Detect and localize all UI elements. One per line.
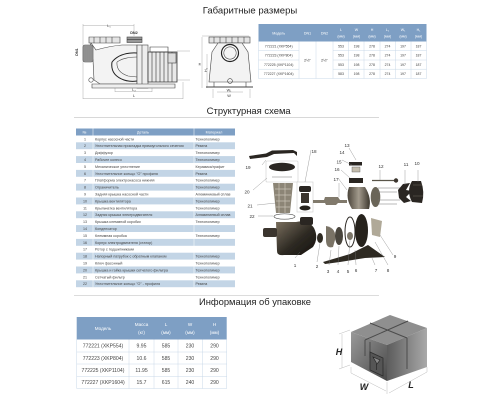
packaging table rows: 585: [162, 368, 170, 374]
pump body: [89, 43, 137, 84]
part: o-ring 22: [274, 214, 295, 219]
dimension table rows: 187: [416, 72, 421, 76]
part: pump body 1: [276, 221, 316, 255]
packaging table rows: 772227 (XKP1604): [81, 380, 125, 386]
icon: package box: [336, 315, 427, 394]
table: dimensions: DN2: [321, 32, 328, 36]
box top: [351, 315, 427, 345]
labels: side view dimensions: DN2: [130, 31, 138, 35]
dimension table rows: 772221 (XKP554): [265, 44, 293, 48]
packaging table rows: 585: [162, 356, 170, 362]
part number labels: [244, 143, 420, 274]
parts table names: Ротор с подшипниками: [95, 248, 134, 252]
label L: L: [408, 380, 414, 390]
parts table numbers: 6: [84, 172, 86, 176]
parts table names: Уплотнительная прокладка прямоугольного сечения: [95, 144, 184, 148]
parts table numbers: [83, 137, 87, 286]
parts table materials: Алюминиевый сплав: [196, 213, 230, 217]
packaging table rows: 10.6: [137, 356, 147, 362]
dimension table rows: 2½": [321, 58, 329, 62]
labels: side view dimensions: [75, 24, 138, 98]
parts table materials: Технополимер: [196, 255, 220, 259]
dimension table rows: 197: [400, 44, 406, 48]
table: dimensions: (мм): [399, 34, 407, 38]
labels: front view dimensions: H: [198, 62, 202, 65]
parts table materials: Технополимер: [196, 137, 220, 141]
parts table numbers: 14: [83, 227, 87, 231]
parts table materials: Технополимер: [196, 275, 220, 279]
parts table names: Конденсатор: [95, 227, 117, 231]
table: dimensions: L₁: [386, 28, 390, 32]
part: rotor 17: [313, 197, 347, 205]
table: packaging: H: [213, 322, 216, 327]
heading: dimensions: Габаритные размеры: [203, 6, 297, 16]
table: dimensions: (мм): [337, 34, 345, 38]
table: dimensions: H: [371, 28, 374, 32]
parts table numbers: 13: [83, 220, 87, 224]
parts table materials: Технополимер: [196, 262, 220, 266]
drawing: pump side view: [83, 24, 190, 99]
leader lines: [253, 148, 418, 265]
labels: front view dimensions: H₁: [204, 67, 208, 72]
part number labels: 20: [244, 190, 250, 194]
part: outlet 18: [297, 182, 313, 212]
parts table materials: Технополимер: [196, 220, 220, 224]
parts table numbers: 11: [83, 206, 87, 210]
dimension table header: [258, 24, 426, 42]
dimension table rows: 274: [385, 44, 390, 48]
part number labels: 2: [316, 264, 319, 269]
part number labels: 12: [378, 164, 384, 169]
dimension table rows: 278: [369, 72, 375, 76]
dimension table rows: 278: [369, 54, 375, 58]
parts table materials: Резина: [196, 282, 207, 286]
dimension table rows: 553: [338, 63, 344, 67]
parts table names: Ограничитель: [95, 186, 119, 190]
part number labels: 10: [414, 161, 420, 166]
parts table materials: Технополимер: [196, 186, 220, 190]
box right face: [387, 328, 427, 381]
part: o-ring 6: [345, 217, 355, 247]
parts table header: [76, 128, 235, 136]
part number labels: 16: [334, 167, 340, 172]
part number labels: 4: [337, 269, 340, 274]
table: dimensions: (мм): [415, 34, 422, 38]
part: impeller 4: [335, 227, 343, 245]
table: packaging: (мм): [210, 330, 220, 335]
dimension lines: [339, 330, 427, 394]
outlet port: [127, 37, 142, 42]
parts table numbers: 12: [83, 213, 87, 217]
labels: front view dimensions: W: [227, 94, 231, 98]
table: packaging: (кг): [138, 330, 145, 335]
infographic: Информация об упаковке: [199, 296, 311, 307]
table: dimensions: L: [340, 28, 342, 32]
part number labels: 6: [355, 268, 358, 273]
dimension table rows: 278: [369, 44, 375, 48]
dimension table rows: 187: [416, 44, 421, 48]
inlet port: [83, 45, 93, 62]
packaging table rows: 9.95: [137, 344, 147, 350]
part: fan cover 10: [409, 181, 423, 203]
parts table numbers: 18: [83, 255, 87, 259]
table: dimensions: H₁: [417, 28, 421, 32]
labels: side view dimensions: L₂: [132, 88, 136, 92]
table: dimensions: W: [355, 28, 359, 32]
part number labels: 22: [249, 214, 255, 219]
parts table numbers: 10: [83, 199, 87, 203]
box left face: [351, 332, 387, 381]
parts table materials: Технополимер: [196, 268, 220, 272]
table: dimensions: W₁: [401, 28, 406, 32]
parts table numbers: 4: [84, 158, 86, 162]
packaging table rows: 230: [186, 344, 194, 350]
table: packaging: [77, 317, 227, 388]
parts table names: Уплотнительное кольцо "O" профиля: [95, 172, 158, 176]
parts table names: Платформа электронасоса нижняя: [95, 179, 154, 183]
part number labels: 21: [247, 204, 253, 208]
dimension table rows: 278: [369, 63, 375, 67]
parts table names: Ключ фасонный: [95, 262, 122, 266]
dimension table rows: 197: [400, 72, 406, 76]
dimension table rows: 553: [338, 54, 344, 58]
dimension table rows: 274: [385, 72, 390, 76]
packaging table rows: 290: [210, 368, 219, 374]
label H: H: [336, 347, 343, 357]
parts table materials: Технополимер: [196, 234, 220, 238]
part number labels: 3: [327, 269, 330, 274]
part number labels: 5: [347, 269, 350, 274]
part: terminal box 13-15: [349, 162, 362, 166]
dimension table rows: 198: [354, 72, 359, 76]
packaging table rows: 772221 (XKP554): [83, 344, 124, 350]
packaging table rows: 15.7: [137, 380, 147, 386]
part number labels: 14: [339, 150, 345, 155]
heading: packaging: [74, 295, 379, 296]
dimension table rows: 198: [354, 44, 359, 48]
part: platform 7: [323, 245, 385, 264]
parts table materials: Технополимер: [196, 158, 220, 162]
part number labels: 11: [404, 162, 409, 167]
dimension table rows: 197: [400, 63, 406, 67]
table: dimensions: [258, 24, 426, 78]
packaging table rows: 11.95: [135, 368, 148, 374]
parts table numbers: 22: [83, 282, 87, 286]
labels: side view dimensions: DN1: [75, 48, 79, 56]
part number labels: 9: [394, 254, 397, 259]
packaging table rows: 240: [186, 380, 194, 386]
part: mechanical seal 5: [347, 232, 353, 240]
labels: side view dimensions: L: [133, 94, 135, 98]
packaging table header: [77, 317, 227, 340]
parts table names: Крышка вентилятора: [95, 199, 132, 203]
parts table numbers: 16: [83, 241, 87, 245]
part: limiter 9: [371, 218, 382, 237]
parts table materials: Технополимер: [196, 206, 220, 210]
part number labels: 17: [333, 177, 339, 182]
dimension table rows: 274: [385, 63, 390, 67]
parts table materials: [196, 137, 230, 286]
packaging table rows: 615: [162, 380, 170, 386]
label W: W: [360, 382, 370, 392]
parts table names: Крышка клеммной коробки: [95, 220, 141, 224]
packaging table rows: 230: [186, 356, 194, 362]
part: seal 2: [317, 233, 323, 243]
parts table materials: Резина: [196, 172, 207, 176]
flange: [137, 45, 148, 88]
parts table numbers: 8: [84, 186, 86, 190]
parts table materials: Технополимер: [196, 199, 220, 203]
parts table numbers: 9: [84, 192, 86, 196]
box straps: [365, 321, 408, 369]
table: parts: Материал: [206, 131, 222, 135]
dimension table rows: 553: [338, 44, 344, 48]
part number labels: 15: [336, 160, 342, 164]
table: packaging: Модель: [95, 326, 112, 331]
table: parts: [76, 128, 235, 287]
parts table materials: Алюминиевый сплав: [196, 192, 230, 196]
table: packaging: L: [165, 322, 168, 327]
dimension table rows: 274: [385, 54, 390, 58]
part: stator 16: [348, 187, 370, 209]
part number labels: 19: [245, 165, 251, 170]
dimension table rows: 772223 (XKP804): [265, 54, 293, 58]
dimension table rows: [264, 44, 421, 76]
part number labels: 13: [344, 143, 350, 148]
part: wrench 19: [249, 150, 297, 159]
parts table names: Сетчатый фильтр: [95, 275, 125, 279]
part: motor back cover 12: [371, 187, 380, 207]
part: back cover 8: [355, 214, 368, 247]
dimension table rows: 198: [354, 54, 359, 58]
part: diffuser 3: [326, 226, 335, 247]
base: [92, 84, 175, 88]
parts table materials: Керамика/графит: [196, 165, 225, 169]
parts table names: Напорный патрубок с обратным клапаном: [95, 255, 167, 259]
parts table names: Рабочее колесо: [95, 158, 122, 162]
dimension table rows: 772225 (XKP1104): [264, 63, 293, 67]
table: dimensions: Модель: [272, 32, 285, 36]
part number labels: 8: [387, 268, 390, 273]
packaging table rows: 230: [186, 368, 194, 374]
parts table materials: Резина: [196, 144, 207, 148]
part number labels: 7: [375, 268, 378, 273]
parts table names: Задняя крышка насосной части: [95, 192, 148, 196]
dimension table rows: 198: [354, 63, 359, 67]
parts table names: Диффузор: [95, 151, 113, 155]
parts table numbers: 15: [83, 234, 87, 238]
part: strainer 21: [273, 183, 293, 213]
parts table numbers: 3: [84, 151, 86, 155]
parts table numbers: 19: [83, 262, 87, 266]
parts table names: Механическое уплотнение: [95, 165, 140, 169]
parts table names: [95, 137, 184, 286]
heading: structure diagram: Структурная схема: [207, 105, 291, 116]
pump strainer lid: [89, 37, 120, 43]
table: packaging: (мм): [185, 330, 195, 335]
parts table materials: Технополимер: [196, 151, 220, 155]
dimension lines: [83, 24, 190, 99]
parts table names: Крыльчатка вентилятора: [95, 206, 138, 210]
dimension table rows: 2½": [304, 58, 312, 62]
table: packaging: W: [188, 322, 193, 327]
packaging table rows: 290: [210, 380, 219, 386]
dimension table rows: 187: [416, 54, 421, 58]
parts table numbers: 2: [84, 144, 86, 148]
parts table numbers: 17: [83, 248, 87, 252]
parts table stripes: [76, 142, 235, 287]
table: packaging: Масса: [135, 322, 149, 327]
parts table numbers: 1: [84, 137, 86, 141]
table: dimensions: DN1: [304, 32, 311, 36]
packaging table rows: 290: [210, 356, 219, 362]
parts table materials: Технополимер: [196, 179, 220, 183]
parts table names: Клеммная коробка: [95, 234, 128, 238]
table: parts: Деталь: [137, 131, 149, 135]
parts table numbers: 20: [83, 268, 87, 272]
parts table names: Задняя крышка электродвигателя: [95, 213, 152, 217]
labels: side view dimensions: L₁: [107, 24, 111, 28]
dimension table rows: 583: [338, 72, 344, 76]
part number labels: 18: [311, 149, 317, 154]
part: strainer lid 20: [266, 161, 298, 182]
parts table numbers: 7: [84, 179, 86, 183]
labels: front view dimensions: W₁: [227, 88, 232, 92]
table: dimensions: (мм): [368, 34, 376, 38]
dimension table rows: 197: [400, 54, 406, 58]
table: parts: №: [83, 131, 87, 135]
parts table names: Корпус электродвигателя (статор): [95, 241, 152, 245]
motor: [148, 52, 177, 82]
parts table numbers: 5: [84, 165, 86, 169]
part number labels: 1: [294, 263, 297, 268]
packaging table rows: 772223 (XKP804): [83, 356, 124, 362]
parts table names: Корпус насосной части: [95, 137, 134, 141]
parts table numbers: 21: [83, 275, 87, 279]
table: packaging: (мм): [161, 330, 171, 335]
part: fan 11: [398, 183, 412, 203]
dimension table rows: 187: [416, 63, 421, 67]
packaging table rows: 772225 (XKP1104): [82, 368, 125, 374]
packaging table rows: 290: [210, 344, 219, 350]
fragile label: [370, 352, 383, 376]
packaging table rows: 585: [162, 344, 170, 350]
packaging table rows: [81, 344, 219, 386]
parts table names: Крышка и гайка крышки сетчатого фильтра: [95, 268, 169, 272]
table: dimensions: (мм): [353, 34, 360, 38]
dimension table rows: 772227 (XKP1604): [264, 72, 294, 76]
parts table names: Уплотнительное кольцо "O" - профиля: [95, 282, 160, 286]
table: dimensions: (мм): [384, 34, 391, 38]
drawing: pump front view: [202, 36, 253, 98]
diagram: exploded pump: [249, 148, 423, 265]
labels: front view dimensions: [198, 62, 232, 98]
